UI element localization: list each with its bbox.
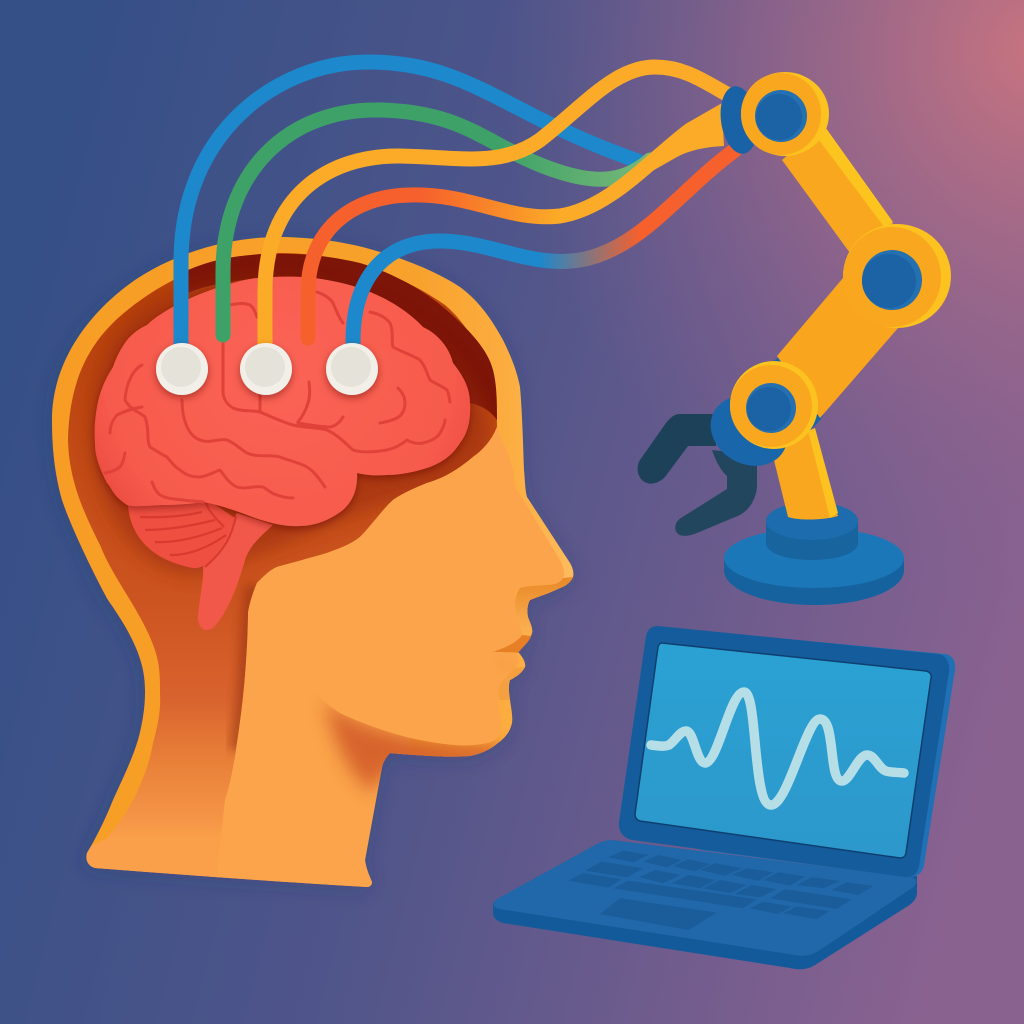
head: face plane — [248, 427, 564, 745]
electrode left — [156, 343, 208, 395]
laptop: brain wave line — [651, 692, 904, 805]
robot: rear blue hub — [756, 355, 828, 435]
robot: base disc — [724, 528, 904, 605]
laptop: base top — [493, 840, 916, 956]
electrodes — [156, 343, 378, 395]
robot: middle joint — [843, 224, 951, 328]
head: outer rim — [52, 237, 573, 887]
brain: sulci — [105, 292, 450, 502]
robot: wrist blue hub — [716, 84, 762, 156]
laptop: base edge — [493, 876, 917, 969]
robot: lower arm — [772, 431, 838, 520]
electrode centre — [240, 343, 292, 395]
cable: orange to yellow — [308, 110, 725, 338]
robot: upper arm — [782, 124, 893, 253]
cable: blue one — [181, 62, 638, 345]
cable: blue to orange — [353, 150, 735, 342]
brain — [95, 277, 470, 630]
cable: green — [223, 110, 650, 335]
robot: base cylinder — [766, 502, 858, 560]
brain: brain stem — [198, 513, 273, 630]
laptop: lid — [619, 626, 949, 877]
robot: lower arm highlight — [808, 428, 838, 518]
laptop — [493, 626, 955, 969]
head: shadow under jaw — [325, 700, 510, 792]
head: hollow cavity — [68, 253, 497, 890]
head: under-nose shade — [515, 577, 573, 635]
robot: gripper hub — [698, 382, 800, 480]
head: mouth line — [493, 635, 531, 653]
robot: gripper claw upper — [638, 414, 716, 484]
brain: cerebrum — [95, 277, 470, 526]
head: lip crease — [495, 655, 518, 672]
head: shadow cast by neck layer — [236, 585, 252, 750]
robot: top joint — [741, 72, 829, 156]
head: shadow around brain — [90, 279, 490, 574]
head: dark shadow above brain — [188, 254, 497, 420]
laptop: keyboard — [568, 851, 873, 930]
cables — [181, 62, 735, 345]
brain: cerebellum — [128, 498, 235, 568]
head silhouette — [52, 237, 573, 890]
robot: middle arm — [777, 278, 898, 418]
laptop: lid back edge — [660, 627, 955, 877]
robot: gripper claw lower — [675, 450, 757, 536]
robot arm — [638, 72, 951, 605]
head: neck layer — [215, 427, 497, 890]
laptop: screen — [635, 643, 931, 858]
robot: lower joint — [730, 361, 818, 449]
head: lower lip shade — [498, 667, 525, 700]
cable: yellow upper — [265, 67, 732, 345]
cable: yellow wedge into wrist — [640, 106, 724, 178]
robot: upper arm highlight — [813, 124, 893, 228]
brain: cerebellum folds — [140, 500, 236, 567]
electrode right — [326, 343, 378, 395]
